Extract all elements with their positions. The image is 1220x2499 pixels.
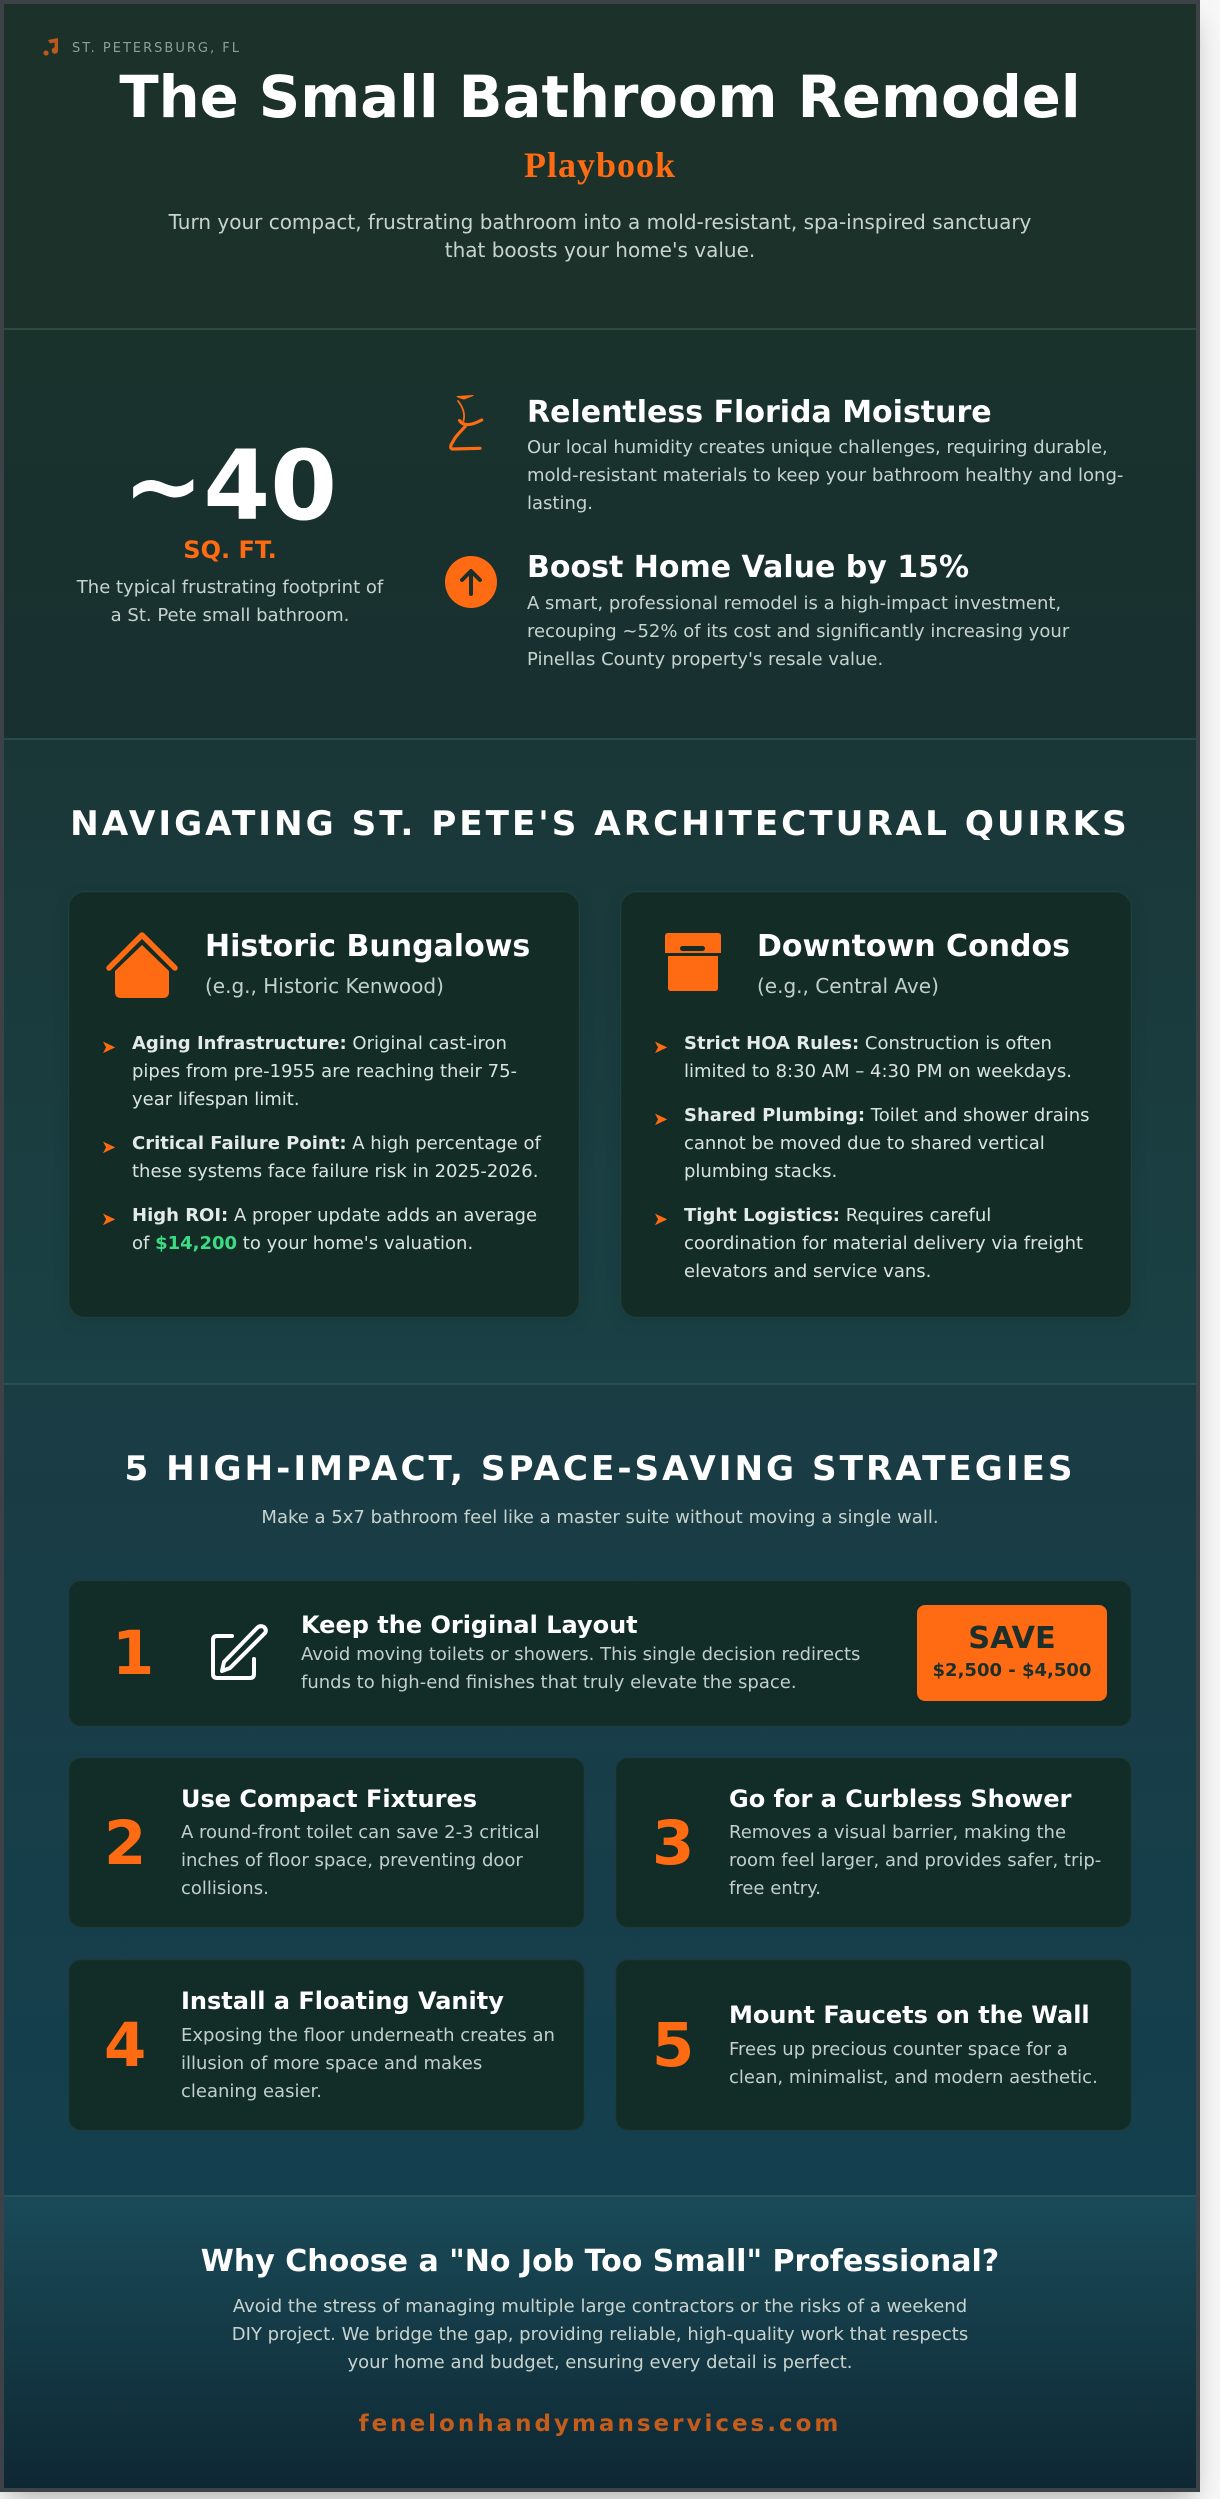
card heading: Historic Bungalows bbox=[205, 929, 530, 964]
strategy title: Keep the Original Layout bbox=[301, 1611, 638, 1639]
footer text: your home and budget, ensuring every detail is perfect. bbox=[348, 2352, 852, 2373]
fact: moisture text: mold-resistant materials to keep your bathroom healthy and long- bbox=[527, 465, 1123, 486]
icon: house bbox=[106, 932, 178, 998]
bullet: high roi: of $14,200 to your home's valuation. bbox=[132, 1233, 473, 1254]
bullet list: ➤ bbox=[101, 1137, 116, 1158]
bullet: hoa rules: limited to 8:30 AM – 4:30 PM on weekdays. bbox=[684, 1061, 1072, 1082]
bullet: aging infrastructure: year lifespan limit. bbox=[132, 1089, 300, 1110]
fact: moisture heading: Relentless Florida Moisture bbox=[527, 395, 992, 430]
strategy 3 bbox=[616, 1758, 1131, 1927]
section heading: NAVIGATING ST. PETE'S ARCHITECTURAL QUIRKS bbox=[70, 804, 1130, 844]
panel: key facts bbox=[0, 330, 1200, 739]
footer panel bbox=[4, 2197, 1196, 2488]
section heading: 5 HIGH-IMPACT, SPACE-SAVING STRATEGIES bbox=[124, 1449, 1076, 1489]
bullet: high roi: High ROI: A proper update adds an average bbox=[132, 1205, 537, 1226]
bullet list: ➤ bbox=[653, 1109, 668, 1130]
icon: moisture bbox=[449, 395, 484, 451]
fact: value text bbox=[527, 593, 1070, 670]
header panel bbox=[0, 0, 1200, 329]
bullet list: ➤ bbox=[653, 1209, 668, 1230]
bullet: hoa rules bbox=[653, 1033, 1072, 1082]
bullet: aging infrastructure: Aging Infrastructure: Original cast-iron bbox=[132, 1033, 507, 1054]
savings badge bbox=[917, 1605, 1107, 1701]
strategy title: Go for a Curbless Shower bbox=[729, 1785, 1072, 1813]
strategy text: Exposing the floor underneath creates an bbox=[181, 2025, 555, 2046]
number: 5 bbox=[652, 2011, 694, 2081]
strategy text: cleaning easier. bbox=[181, 2081, 322, 2102]
strategy text bbox=[729, 1822, 1101, 1899]
bullet: aging infrastructure bbox=[101, 1033, 517, 1110]
icon: pencil on pad bbox=[211, 1624, 268, 1680]
bullet: hoa rules: Strict HOA Rules: Construction is often bbox=[684, 1033, 1052, 1054]
intro text: Turn your compact, frustrating bathroom into a mold-resistant, spa-inspired sanctuary bbox=[169, 210, 1031, 234]
fact: value text: recouping ~52% of its cost and significantly increasing your bbox=[527, 621, 1069, 642]
icon: music note bbox=[43, 38, 58, 56]
subtitle: playbook: Playbook bbox=[524, 145, 676, 185]
bullet: tight logistics bbox=[653, 1205, 1083, 1282]
strategy title: Use Compact Fixtures bbox=[181, 1785, 477, 1813]
fact: moisture text: lasting. bbox=[527, 493, 593, 514]
card heading: Downtown Condos bbox=[757, 929, 1070, 964]
fact: value heading: Boost Home Value by 15% bbox=[527, 550, 969, 585]
strategy text bbox=[181, 2025, 555, 2102]
number: 3 bbox=[652, 1809, 694, 1879]
fact: value text: Pinellas County property's resale value. bbox=[527, 649, 883, 670]
card sub-heading: (e.g., Historic Kenwood) bbox=[205, 974, 444, 998]
bullet: shared plumbing: Shared Plumbing: Toilet and shower drains bbox=[684, 1105, 1090, 1126]
number: 4 bbox=[104, 2011, 146, 2081]
bullet: critical failure: these systems face failure risk in 2025-2026. bbox=[132, 1161, 538, 1182]
stat caption bbox=[76, 577, 384, 626]
bullet list bbox=[653, 1033, 1090, 1282]
bullet list: ➤ bbox=[653, 1037, 668, 1058]
bullet: high roi bbox=[101, 1205, 537, 1254]
strategy text: Avoid moving toilets or showers. This single decision redirects bbox=[301, 1644, 860, 1665]
strategy text: A round-front toilet can save 2-3 critical bbox=[181, 1822, 540, 1843]
strategy text bbox=[301, 1644, 860, 1693]
intro text bbox=[168, 210, 1031, 262]
footer text: DIY project. We bridge the gap, providing reliable, high-quality work that respects bbox=[232, 2324, 968, 2345]
footer text: Avoid the stress of managing multiple large contractors or the risks of a weekend bbox=[233, 2296, 967, 2317]
panel: architectural quirks bbox=[0, 740, 1200, 1383]
stat unit: SQ. FT. bbox=[183, 536, 277, 564]
number: 1 bbox=[112, 1619, 154, 1689]
strategy text bbox=[729, 2039, 1098, 2088]
strategy text: room feel larger, and provides safer, trip- bbox=[729, 1850, 1101, 1871]
badge label: SAVE bbox=[968, 1621, 1056, 1656]
icon: up arrow bbox=[445, 556, 497, 608]
website link: fenelonhandymanservices.com bbox=[359, 2411, 841, 2437]
card: historic bungalows bbox=[69, 892, 579, 1317]
strategy 1 bbox=[69, 1581, 1131, 1726]
fact: moisture text bbox=[527, 437, 1123, 514]
strategy title: Install a Floating Vanity bbox=[181, 1987, 504, 2015]
bullet: tight logistics: Tight Logistics: Requires careful bbox=[684, 1205, 991, 1226]
bullet list: ➤ bbox=[101, 1037, 116, 1058]
footer heading: Why Choose a "No Job Too Small" Professional? bbox=[201, 2244, 999, 2279]
panel: strategies bbox=[0, 1385, 1200, 2195]
bullet: tight logistics: elevators and service vans. bbox=[684, 1261, 931, 1282]
bullet list: ➤ bbox=[101, 1209, 116, 1230]
bullet: critical failure: Critical Failure Point: A high percentage of bbox=[132, 1133, 541, 1154]
stat caption: a St. Pete small bathroom. bbox=[111, 605, 349, 626]
footer text bbox=[232, 2296, 968, 2373]
strategy text: free entry. bbox=[729, 1878, 821, 1899]
card: downtown condos bbox=[621, 892, 1131, 1317]
strategy text: clean, minimalist, and modern aesthetic. bbox=[729, 2067, 1098, 2088]
fact: moisture text: Our local humidity creates unique challenges, requiring durable, bbox=[527, 437, 1108, 458]
bullet: shared plumbing bbox=[653, 1105, 1090, 1182]
fact: value text: A smart, professional remodel is a high-impact investment, bbox=[527, 593, 1061, 614]
intro text: that boosts your home's value. bbox=[445, 238, 755, 262]
stat caption: The typical frustrating footprint of bbox=[77, 577, 383, 598]
badge amount: $2,500 - $4,500 bbox=[933, 1660, 1091, 1681]
icon: box bbox=[665, 933, 721, 991]
section sub-heading: Make a 5x7 bathroom feel like a master suite without moving a single wall. bbox=[261, 1507, 939, 1528]
strategy text: collisions. bbox=[181, 1878, 269, 1899]
strategy text: inches of floor space, preventing door bbox=[181, 1850, 523, 1871]
bullet list bbox=[101, 1033, 542, 1254]
number: 2 bbox=[104, 1809, 146, 1879]
bullet: critical failure bbox=[101, 1133, 542, 1182]
strategy 5 bbox=[616, 1960, 1131, 2130]
bullet: shared plumbing: cannot be moved due to shared vertical bbox=[684, 1133, 1045, 1154]
strategy text: Removes a visual barrier, making the bbox=[729, 1822, 1066, 1843]
stat value: ~40 bbox=[123, 430, 337, 542]
strategy text: funds to high-end finishes that truly elevate the space. bbox=[301, 1672, 797, 1693]
bullet: tight logistics: coordination for material delivery via freight bbox=[684, 1233, 1083, 1254]
strategy text bbox=[181, 1822, 540, 1899]
stat: 40 sq ft bbox=[76, 430, 384, 626]
bullet: aging infrastructure: pipes from pre-1955 are reaching their 75- bbox=[132, 1061, 517, 1082]
strategy 2 bbox=[69, 1758, 584, 1927]
bullet: shared plumbing: plumbing stacks. bbox=[684, 1161, 837, 1182]
location label: ST. PETERSBURG, FL bbox=[72, 41, 241, 56]
strategy text: illusion of more space and makes bbox=[181, 2053, 482, 2074]
title: The Small Bathroom Remodel bbox=[119, 64, 1081, 131]
card sub-heading: (e.g., Central Ave) bbox=[757, 974, 939, 998]
strategy title: Mount Faucets on the Wall bbox=[729, 2001, 1090, 2029]
strategy text: Frees up precious counter space for a bbox=[729, 2039, 1068, 2060]
strategy 4 bbox=[69, 1960, 584, 2130]
